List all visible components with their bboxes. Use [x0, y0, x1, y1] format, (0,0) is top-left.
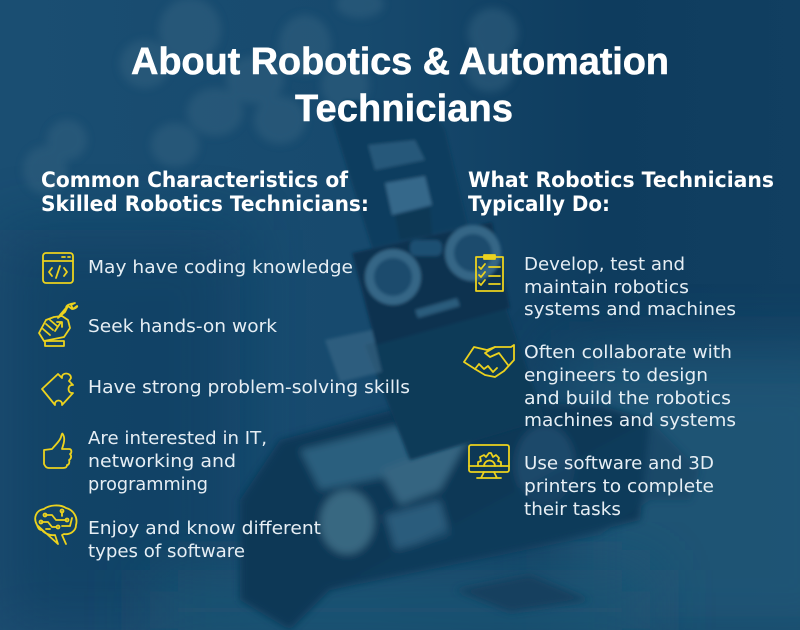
bokeh: [23, 0, 518, 194]
icon: thumbs up: [44, 434, 71, 468]
text: hands-on work: Seek hands-on work: [88, 316, 278, 337]
arm: [332, 100, 468, 248]
column: [365, 305, 545, 460]
text: software and 3D printers: printers to complete: [524, 476, 714, 497]
heading: common characteristics: Skilled Robotics Technicians:: [41, 192, 369, 216]
text: interests: networking and: [88, 451, 236, 472]
icon: monitor with gear: [469, 445, 509, 478]
text: problem-solving: Have strong problem-solving skills: [88, 377, 410, 398]
text: software: types of software: [88, 541, 245, 562]
heading: what technicians do: What Robotics Technicians: [468, 168, 774, 192]
icon: puzzle piece: [42, 374, 73, 405]
text: software and 3D printers: [524, 453, 714, 520]
icon: hand holding wrench: [39, 303, 77, 346]
text: collaborate: and build the robotics: [524, 388, 731, 409]
text: develop and test: maintain robotics: [524, 277, 689, 298]
icon: circuit brain: [35, 505, 77, 544]
text: interests: Are interested in IT,: [88, 428, 267, 449]
heading: common characteristics: Common Characteristics of: [41, 168, 349, 192]
sensor board: [352, 222, 510, 345]
icon: clipboard checklist: [476, 255, 503, 291]
icon: code window: [43, 253, 73, 283]
text: interests: programming: [88, 474, 208, 495]
text: coding knowledge: May have coding knowledge: [88, 257, 353, 278]
text: collaborate: Often collaborate with: [524, 342, 732, 363]
heading: what technicians do: [468, 168, 774, 216]
text: develop and test: systems and machines: [524, 299, 736, 320]
title: [131, 41, 669, 130]
heading: what technicians do: Typically Do:: [468, 192, 610, 216]
title: Technicians: [295, 88, 513, 130]
text: collaborate: machines and systems: [524, 410, 736, 431]
text: collaborate: engineers to design: [524, 365, 708, 386]
text: software: [88, 518, 321, 562]
title: About Robotics & Automation: [131, 41, 669, 83]
text: software and 3D printers: their tasks: [524, 499, 621, 520]
icon: handshake: [464, 345, 514, 377]
text: software: Enjoy and know different: [88, 518, 321, 539]
text: collaborate: [524, 342, 736, 431]
heading: common characteristics: [41, 168, 369, 216]
text: interests: [88, 428, 267, 495]
lower body: [240, 400, 700, 630]
text: develop and test: [524, 254, 736, 320]
text: develop and test: Develop, test and: [524, 254, 685, 275]
text: software and 3D printers: Use software and 3D: [524, 453, 714, 474]
